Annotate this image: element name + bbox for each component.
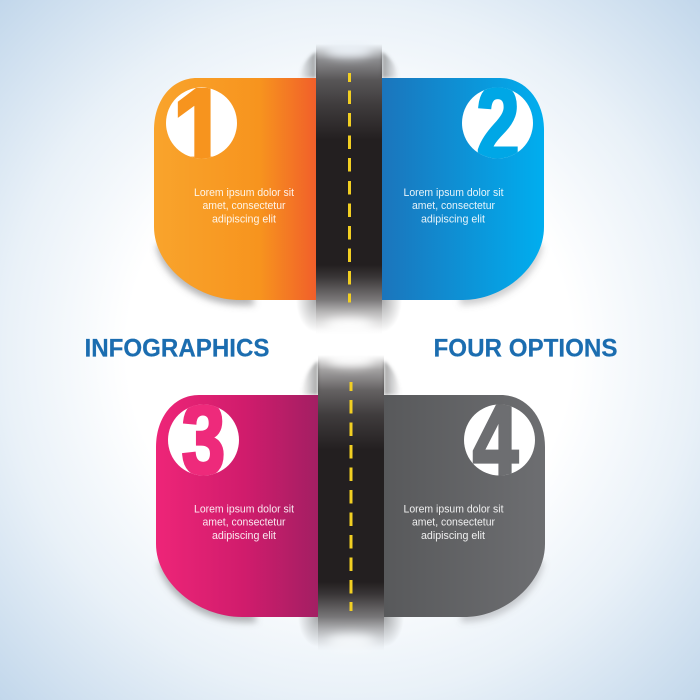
panel 2 text: adipiscing elit — [421, 214, 485, 226]
panel 2 text: amet, consectetur — [412, 200, 495, 212]
panel 3: magenta — [156, 383, 318, 617]
panel 4 text: amet, consectetur — [412, 516, 495, 528]
panel shadows — [156, 240, 544, 622]
panel 1 text: adipiscing elit — [212, 214, 276, 226]
badge 2: 2 — [476, 64, 520, 183]
badge 3: 3 — [182, 383, 225, 496]
panel 4 text: adipiscing elit — [421, 530, 485, 542]
panel 3 text: adipiscing elit — [212, 530, 276, 542]
panel 4 text: Lorem ipsum dolor sit — [404, 504, 504, 516]
road: bottom — [318, 352, 384, 651]
road markings: bottom — [350, 382, 352, 611]
road end fades: top — [325, 43, 373, 333]
panel 2 text: Lorem ipsum dolor sit — [404, 187, 504, 199]
panel 1 text: amet, consectetur — [202, 200, 286, 212]
panel 3 text: amet, consectetur — [202, 516, 286, 528]
panel 2: blue — [382, 64, 544, 300]
panel 3 text: Lorem ipsum dolor sit — [194, 504, 294, 516]
badge 4: 4 — [473, 382, 519, 500]
road shadow flaps: top road — [296, 52, 402, 332]
badge 3 — [168, 404, 239, 476]
panel 1 text: Lorem ipsum dolor sit — [194, 187, 294, 199]
badge 2 — [462, 88, 533, 158]
badge 4 — [464, 404, 535, 476]
badge 1: 1 — [172, 65, 228, 196]
road: top — [316, 43, 382, 334]
road markings: top — [348, 73, 351, 302]
road shadow flaps: bottom road — [298, 361, 404, 647]
badge 1 — [166, 88, 237, 158]
heading: four options: FOUR OPTIONS — [434, 334, 618, 362]
heading: infographics: INFOGRAPHICS — [84, 334, 270, 362]
panel 4: grey — [384, 382, 545, 617]
panel 1: orange — [154, 65, 316, 300]
road end fades: bottom — [327, 352, 375, 649]
